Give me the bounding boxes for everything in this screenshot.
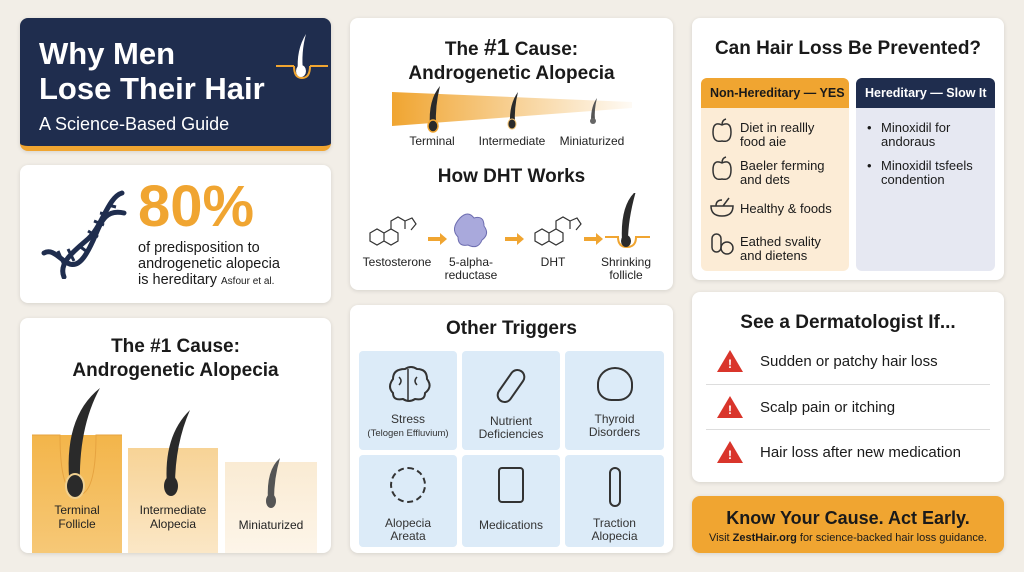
column: non-hereditary: Baeler ferming (740, 158, 825, 173)
title panel (20, 18, 331, 151)
CTA banner (692, 496, 1004, 553)
column: non-hereditary: food aie (740, 134, 786, 149)
gradient stages: Miniaturized (560, 134, 624, 148)
trigger: alopecia areata: Areata (390, 529, 426, 543)
column: hereditary: Minoxidil tsfeels (881, 158, 973, 173)
trigger: traction: Traction (593, 516, 636, 530)
DHT pathway: Testosterone (363, 255, 432, 269)
trigger: stress: Stress (391, 412, 425, 426)
trigger: alopecia areata (359, 455, 457, 547)
heading: DHT: How DHT Works (438, 166, 585, 187)
warning list (706, 350, 990, 463)
trigger: thyroid: Thyroid (594, 412, 634, 426)
column: hereditary: • (867, 120, 872, 135)
panel: dermatologist (692, 292, 1004, 482)
CTA banner: Know Your Cause. Act Early. (726, 508, 970, 528)
heading: Androgenetic Alopecia (408, 63, 615, 84)
CTA banner: Visit ZestHair.org for science-backed hair loss guidance. (709, 532, 987, 544)
column: hereditary (856, 78, 995, 271)
title text: Why Men (39, 36, 175, 71)
heading (408, 34, 615, 84)
column: hereditary: andoraus (881, 134, 935, 149)
heading (72, 336, 279, 381)
column: non-hereditary: Eathed svality (740, 234, 821, 249)
follicle stages: Miniaturized (239, 518, 303, 532)
DHT pathway: Shrinking (601, 255, 651, 269)
gradient stages (392, 86, 632, 148)
column: hereditary: Minoxidil for (881, 120, 950, 135)
follicle stages: Follicle (58, 517, 96, 531)
stat 80%: 80% (138, 174, 254, 239)
column: non-hereditary: Diet in reallly (740, 120, 814, 135)
panel: middle top (350, 18, 673, 290)
trigger: medications (462, 455, 560, 547)
trigger: nutrient: Nutrient (490, 414, 532, 428)
trigger: thyroid (565, 351, 664, 450)
trigger: thyroid: Disorders (589, 425, 640, 439)
warning list: Hair loss after new medication (760, 444, 961, 461)
warning list: ! (728, 448, 732, 462)
warning list: Scalp pain or itching (760, 399, 895, 416)
column: non-hereditary: Non-Hereditary — YES (710, 86, 845, 100)
stat text: is hereditary Asfour et al. (138, 272, 274, 288)
subtitle: A Science-Based Guide (39, 114, 229, 134)
stat panel (20, 165, 331, 303)
column: hereditary: condention (881, 172, 945, 187)
follicle stages: Terminal (54, 503, 100, 517)
trigger: stress (359, 351, 457, 450)
gradient stages: Terminal (409, 134, 455, 148)
title text (39, 36, 265, 106)
heading: Androgenetic Alopecia (72, 360, 279, 381)
column: non-hereditary: Healthy & foods (740, 201, 832, 216)
panel: prevention (692, 18, 1004, 280)
heading: See a Dermatologist If... (740, 312, 956, 333)
column: non-hereditary: and dets (740, 172, 790, 187)
column: non-hereditary (701, 78, 849, 271)
trigger: nutrient (462, 351, 560, 450)
column: non-hereditary: and dietens (740, 248, 807, 263)
DHT pathway: follicle (609, 268, 643, 282)
gradient stages: Intermediate (479, 134, 546, 148)
column: hereditary: • (867, 158, 872, 173)
trigger: medications: Medications (479, 518, 543, 532)
trigger: traction (565, 455, 664, 547)
stat text: androgenetic alopecia (138, 256, 280, 272)
follicle stages (32, 388, 317, 553)
trigger: stress: (Telogen Effluvium) (367, 428, 449, 439)
panel: left cause (20, 318, 331, 553)
trigger: traction: Alopecia (591, 529, 638, 543)
stat text (138, 240, 280, 288)
DHT pathway: DHT (541, 255, 566, 269)
DHT pathway (362, 193, 651, 282)
heading: Can Hair Loss Be Prevented? (715, 38, 981, 59)
panel: other triggers (350, 305, 673, 553)
DHT pathway: 5-alpha- (449, 255, 493, 269)
column: hereditary: Hereditary — Slow It (865, 86, 987, 100)
icon: DNA (42, 190, 126, 279)
follicle stages: Alopecia (150, 517, 196, 531)
heading: The #1 Cause: (111, 336, 240, 357)
warning list: ! (728, 403, 732, 417)
DHT pathway: reductase (445, 268, 498, 282)
warning list: ! (728, 357, 732, 371)
trigger: nutrient: Deficiencies (479, 427, 543, 441)
follicle stages: Intermediate (140, 503, 207, 517)
icon: follicle (276, 34, 328, 79)
title text: Lose Their Hair (39, 71, 265, 106)
heading: Other Triggers (446, 318, 577, 339)
warning list: Sudden or patchy hair loss (760, 353, 938, 370)
trigger: alopecia areata: Alopecia (385, 516, 431, 530)
stat text: of predisposition to (138, 240, 260, 256)
heading: The #1 Cause: (445, 34, 578, 60)
